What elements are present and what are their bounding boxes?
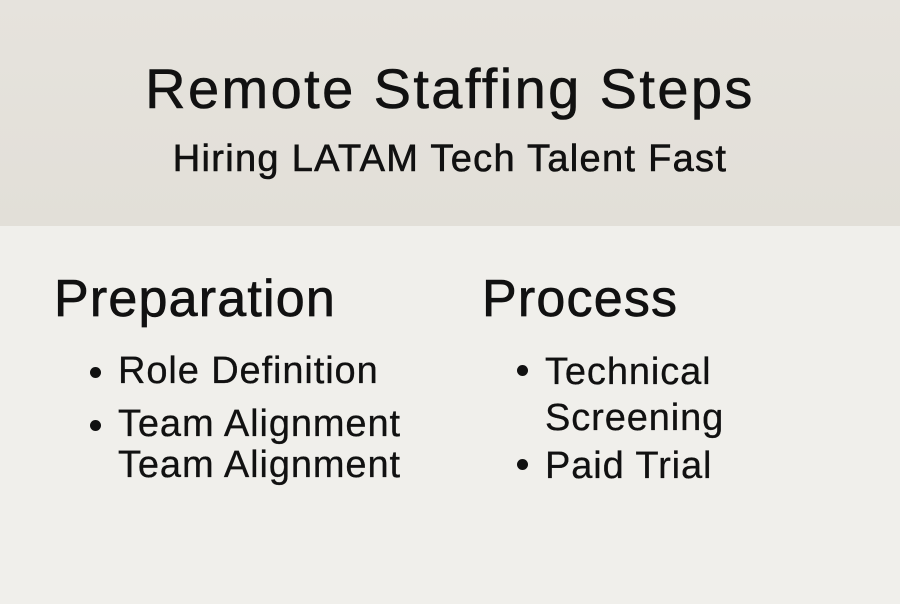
list: process: Screening — [545, 397, 724, 439]
list: process: Paid Trial — [545, 445, 712, 487]
title: Remote Staffing Steps — [145, 57, 755, 120]
list: preparation: Team Alignment — [118, 403, 401, 445]
list: process: Technical — [545, 351, 712, 393]
list: preparation: Team Alignment — [118, 444, 401, 486]
list: preparation: Role Definition — [118, 350, 379, 392]
heading: preparation: Preparation — [54, 270, 336, 328]
list: preparation — [90, 350, 401, 486]
list: process — [517, 351, 724, 487]
header band — [0, 0, 900, 226]
subtitle: Hiring LATAM Tech Talent Fast — [173, 138, 727, 180]
heading: process: Process — [482, 270, 678, 328]
